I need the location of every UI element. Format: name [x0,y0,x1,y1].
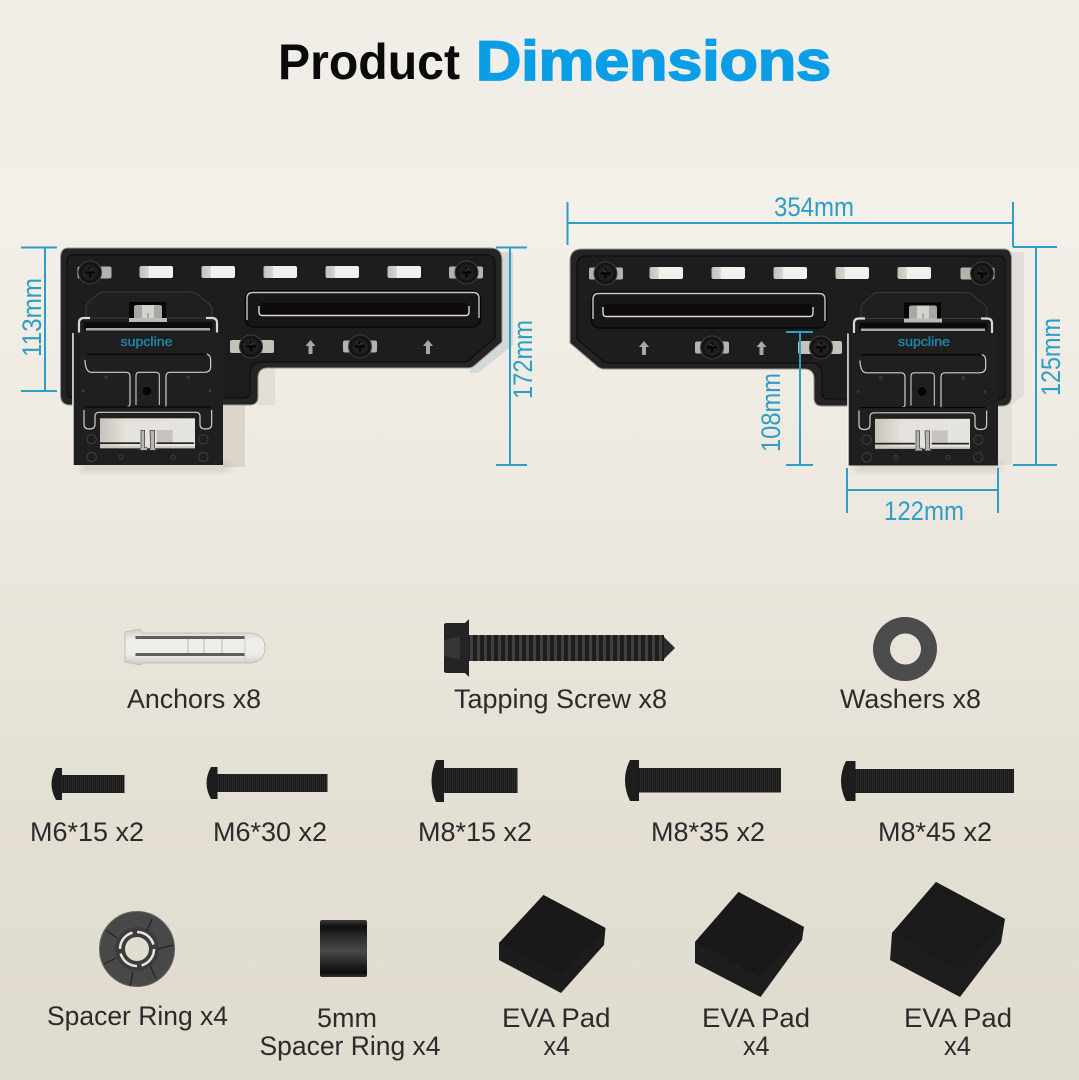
label: EVA Pad [702,1003,810,1033]
icon: bolt [841,761,1014,801]
part: M8*15 bolt [418,760,532,847]
icon: EVA pad [695,892,804,997]
part: EVA pad 3 [890,882,1020,1061]
icon: EVA pad [499,895,606,993]
title [278,29,831,92]
part: M8*45 bolt [841,761,1014,847]
part: M6*30 bolt [206,767,328,847]
title: Product [278,34,460,90]
left mounting bracket [60,248,513,471]
right logo: supcline [898,334,950,349]
icon: bolt [52,768,124,800]
label: x4 [944,1031,971,1061]
right bracket shadow [855,252,1024,471]
label: x4 [743,1031,770,1061]
dimension: 122mm [847,468,998,526]
dimension: 125mm: 125mm [1036,318,1066,396]
right mounting bracket [570,249,1024,471]
icon: washer [873,617,937,681]
title: Dimensions [476,29,831,92]
label: Tapping Screw x8 [454,684,667,714]
dimension: 354mm: 354mm [774,192,854,222]
label: M6*30 x2 [213,817,327,847]
label: x4 [544,1031,570,1061]
label: EVA Pad [904,1003,1012,1033]
part: washers [840,617,981,714]
icon: 5mm spacer [320,920,367,977]
label: M8*45 x2 [878,817,992,847]
left logo: supcline [120,334,172,349]
icon: bolt [625,760,781,801]
dimension: 122mm: 122mm [884,496,964,526]
dimension: 113mm: 113mm [17,278,47,357]
dimension: 108mm: 108mm [756,373,786,452]
dimension: 172mm: 172mm [508,320,538,399]
label: Washers x8 [840,684,981,714]
part: M6*15 bolt [30,768,144,847]
part: tapping screw [444,619,675,714]
label: Anchors x8 [127,684,261,714]
part: EVA pad 1 [499,895,618,1061]
icon: bolt [432,760,518,802]
icon: EVA pad [890,882,1005,997]
dimension: 125mm [1013,247,1066,465]
icon: spacer ring [100,912,174,986]
label: Spacer Ring x4 [47,1001,228,1031]
dimension: 113mm [17,248,57,391]
part: 5mm spacer ring [260,920,440,1061]
dimension: 354mm [568,192,1013,247]
left bracket shadow [80,252,513,471]
part: EVA pad 2 [695,892,818,1061]
label: M6*15 x2 [30,817,144,847]
part: anchors [125,629,265,714]
label: M8*15 x2 [418,817,532,847]
part: M8*35 bolt [625,760,781,847]
label: M8*35 x2 [651,817,765,847]
dimension: 108mm [756,332,813,465]
label: 5mm [317,1003,377,1033]
label: EVA Pad [502,1003,610,1033]
part: spacer ring [47,912,228,1031]
icon: bolt [206,767,328,799]
icon: anchor [125,629,265,665]
dimension: 172mm [496,248,538,465]
label: Spacer Ring x4 [260,1031,440,1061]
icon: tapping screw [444,619,675,677]
